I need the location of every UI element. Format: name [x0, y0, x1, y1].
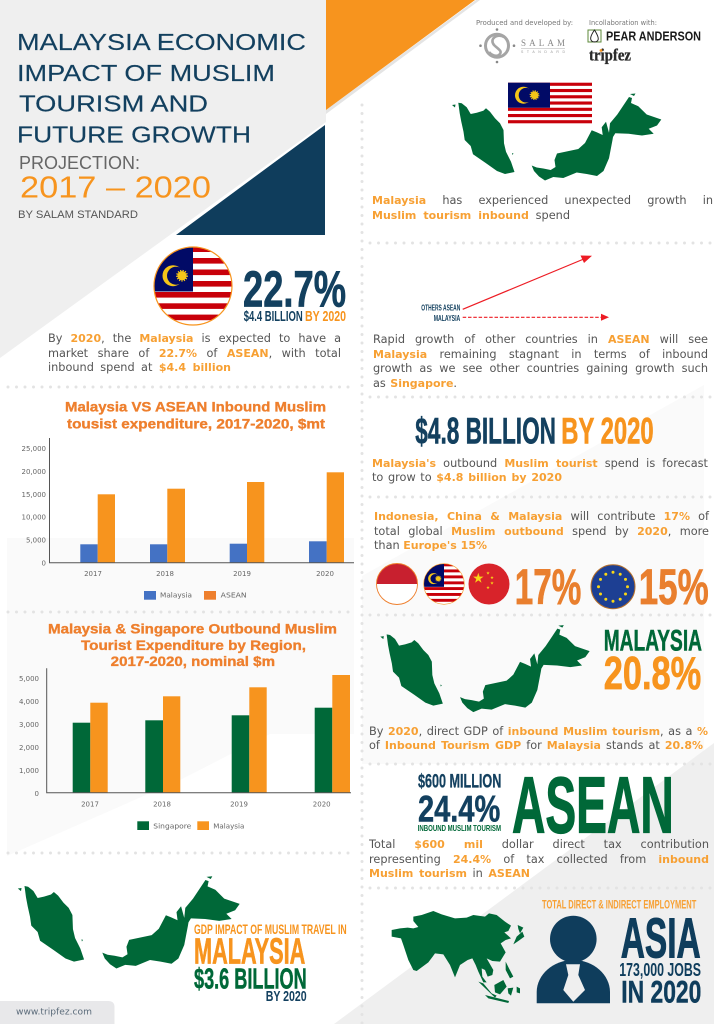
chart title — [48, 620, 337, 669]
bar chart: Malaysia vs ASEAN: 2018 — [156, 570, 174, 578]
credit: collaboration: Incollaboration with: — [589, 19, 657, 27]
bar chart: Singapore vs Malaysia: 2020 — [313, 801, 331, 809]
map: Malaysia — [452, 94, 661, 180]
text: market share: inbound spend at $4.4 billion — [48, 361, 231, 374]
title block — [17, 29, 306, 221]
bar chart: Malaysia vs ASEAN: 2020 — [316, 570, 334, 578]
logos and credits — [476, 19, 701, 65]
bar chart: Singapore vs Malaysia: 4,000 — [19, 698, 39, 706]
bar chart: Malaysia vs ASEAN: 2017 — [84, 570, 102, 578]
flag: Malaysia — [508, 83, 592, 123]
credit: produced by: Produced and developed by: — [476, 19, 573, 27]
text: ASEAN growth: growth as we see other countries gaining growth such — [373, 362, 708, 375]
text: global share: total global Muslim outbound spend by 2020, more — [374, 525, 709, 538]
text: tax contribution: representing 24.4% of tax collected from inbound — [369, 853, 709, 866]
flag: Malaysia circle — [154, 247, 232, 325]
logo: Pear Anderson: PEAR ANDERSON — [606, 29, 701, 44]
text: inbound growth — [372, 194, 717, 224]
bar chart: Singapore vs Malaysia — [19, 668, 351, 809]
text: ASEAN growth: Malaysia remaining stagnant in terms of inbound — [373, 348, 708, 361]
bar chart: Singapore vs Malaysia: 2,000 — [19, 744, 39, 752]
footer: website: www.tripfez.com — [16, 1008, 92, 1018]
text: direct GDP: By 2020, direct GDP of inbound Muslim tourism, as a % — [369, 725, 708, 738]
icon: person with tie — [537, 916, 610, 1003]
chart legend — [137, 821, 244, 830]
panel: global share — [374, 510, 714, 615]
logo: Salam Standard — [479, 28, 565, 63]
bar chart: Singapore vs Malaysia: 5,000 — [19, 675, 39, 683]
bar chart: Malaysia vs ASEAN: 15,000 — [22, 491, 46, 499]
text: market share — [48, 332, 348, 377]
chart title — [65, 399, 326, 431]
stat: by 2020: BY 2020 — [561, 410, 654, 451]
chart legend: ASEAN — [221, 592, 247, 600]
panel: GDP impact — [18, 876, 347, 1005]
bar chart: Singapore vs Malaysia: 2019 — [230, 801, 248, 809]
panel: outbound expenditure chart — [19, 620, 351, 830]
logo: tripfez: tripfez — [589, 46, 631, 65]
text: tax contribution: Total $600 mil dollar direct tax contribution — [369, 838, 709, 851]
stat: 22.7%: 22.7% — [243, 261, 346, 318]
bar chart: Malaysia vs ASEAN: 2019 — [233, 570, 251, 578]
bar chart: Malaysia vs ASEAN: 5,000 — [26, 536, 46, 544]
text: direct GDP: of Inbound Tourism GDP for Malaysia stands at 20.8% — [369, 739, 703, 752]
arrow: others ASEAN — [463, 256, 592, 309]
panel: outbound spend — [372, 410, 717, 487]
title: TOURISM AND — [19, 91, 208, 117]
text: outbound spend: Malaysia's outbound Muslim tourist spend is forecast — [372, 457, 708, 470]
text: global share — [374, 510, 714, 555]
flag: China — [468, 564, 510, 604]
bar chart: Singapore vs Malaysia: 3,000 — [19, 721, 39, 729]
subtitle: years: 2017 – 2020 — [20, 170, 211, 205]
title: FUTURE GROWTH — [17, 121, 251, 147]
bar chart: Malaysia vs ASEAN — [22, 438, 354, 578]
label: others ASEAN: OTHERS ASEAN — [421, 304, 460, 313]
map: Malaysia — [18, 876, 240, 969]
text: ASEAN growth: Rapid growth of other countries in ASEAN will see — [373, 333, 708, 346]
panel: employment — [392, 898, 701, 1010]
chart legend: Malaysia — [213, 822, 244, 830]
map: Asia — [392, 911, 524, 1003]
logo: Salam Standard: SALAM — [521, 38, 565, 48]
chart legend — [144, 591, 247, 600]
stat: $4.4 billion: $4.4 BILLION — [244, 309, 303, 325]
text: global share: than Europe's 15% — [374, 539, 487, 552]
chart title: Tourist Expenditure by Region, — [81, 637, 306, 653]
panel: inbound growth — [372, 83, 717, 224]
panel: direct GDP — [369, 625, 714, 755]
text: inbound growth: Muslim tourism inbound spend — [372, 209, 570, 222]
text: market share: market share of 22.7% of ASEAN, with total — [48, 347, 341, 360]
chart legend: Malaysia — [160, 592, 192, 600]
title: IMPACT OF MUSLIM — [17, 60, 275, 86]
text: tax contribution: Muslim tourism in ASEAN — [369, 867, 530, 880]
map: Malaysia — [380, 625, 590, 712]
heading: GDP impact: GDP IMPACT OF MUSLIM TRAVEL IN — [194, 921, 347, 937]
label: inbound Muslim tourism: INBOUND MUSLIM TOURISM — [418, 823, 501, 833]
bar chart: Malaysia vs ASEAN: 25,000 — [22, 445, 46, 453]
title — [17, 29, 306, 147]
label: Malaysia: MALAYSIA — [434, 314, 460, 323]
chart legend: Singapore — [153, 822, 191, 830]
panel: tax contribution — [369, 760, 714, 883]
stat: $3.6 billion: $3.6 BILLION — [194, 963, 307, 995]
flag: Malaysia circle — [424, 564, 464, 604]
text: global share: Indonesia, China & Malaysia will contribute 17% of — [374, 510, 709, 523]
stat: by 2020: BY 2020 — [305, 309, 346, 325]
arrow: Malaysia — [463, 314, 609, 321]
bar chart: Malaysia vs ASEAN: 20,000 — [22, 468, 46, 476]
text: market share: By 2020, the Malaysia is expected to have a — [48, 332, 341, 345]
logo: Salam Standard: STANDARD — [521, 50, 565, 54]
stat: 17%: 17% — [515, 559, 581, 615]
text: inbound growth: Malaysia has experienced unexpected growth in — [372, 194, 713, 207]
flag: Indonesia — [376, 564, 418, 604]
bar chart: Singapore vs Malaysia: 2018 — [153, 801, 171, 809]
flag: European Union — [591, 565, 635, 609]
footer: website — [0, 1001, 114, 1024]
stat: 24.4%: 24.4% — [418, 789, 500, 830]
subtitle: projection: PROJECTION: — [19, 152, 140, 173]
text: ASEAN growth — [373, 333, 713, 393]
stat: $4.8 billion: $4.8 BILLION — [415, 410, 556, 451]
byline: BY SALAM STANDARD — [18, 209, 138, 221]
panel: ASEAN growth arrows — [373, 256, 713, 393]
panel: inbound expenditure chart — [22, 399, 354, 600]
text: outbound spend — [372, 457, 717, 487]
text: tax contribution — [369, 838, 714, 883]
bar chart: Malaysia vs ASEAN: 10,000 — [22, 514, 46, 522]
heading: Malaysia: MALAYSIA — [194, 930, 305, 971]
chart title: Malaysia VS ASEAN Inbound Muslim — [65, 399, 326, 415]
chart title: tousist expenditure, 2017-2020, $mt — [67, 415, 325, 431]
bar chart: Singapore vs Malaysia: 1,000 — [19, 767, 39, 775]
chart title: Malaysia & Singapore Outbound Muslim — [48, 620, 337, 636]
text: outbound spend: to grow to $4.8 billion by 2020 — [372, 471, 562, 484]
stat: by 2020: BY 2020 — [266, 989, 307, 1005]
chart title: 2017-2020, nominal $m — [111, 653, 275, 669]
text: direct GDP — [369, 725, 714, 755]
panel: market share 22.7% — [48, 247, 348, 377]
stat: $600 million: $600 MILLION — [418, 772, 501, 793]
bar chart: Singapore vs Malaysia: 0 — [35, 790, 39, 798]
title: MALAYSIA ECONOMIC — [17, 29, 306, 55]
bar chart: Malaysia vs ASEAN: 0 — [42, 560, 46, 568]
bar chart: Singapore vs Malaysia: 2017 — [81, 801, 99, 809]
text: ASEAN growth: as Singapore. — [373, 377, 457, 390]
